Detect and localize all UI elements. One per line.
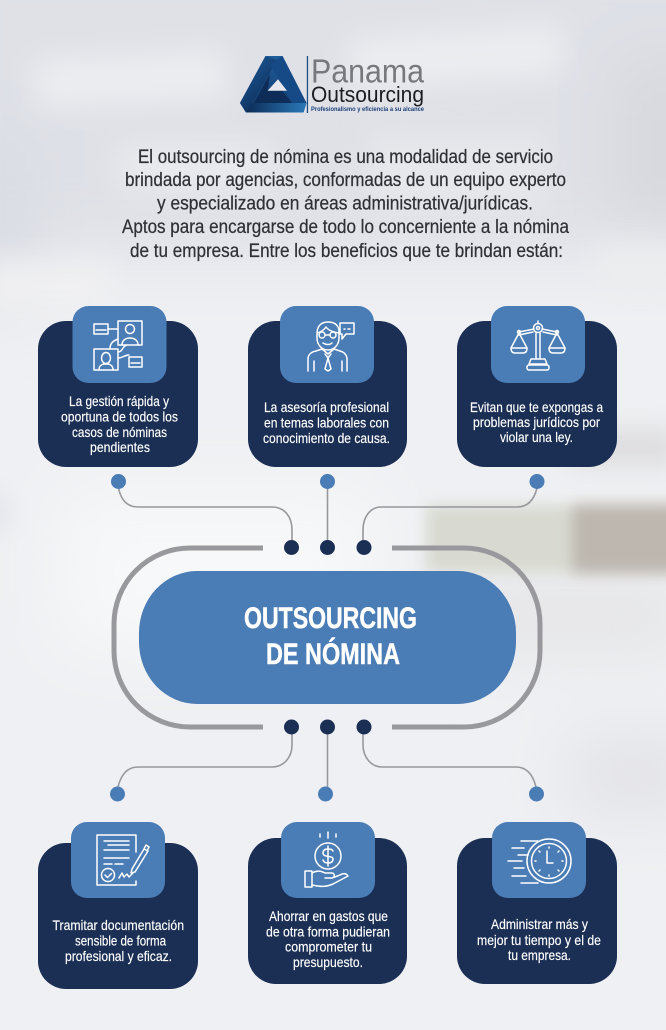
icon: hand holding coin	[305, 832, 348, 887]
intro text: brindada por agencias, conformadas de un equipo experto	[125, 170, 566, 191]
logo triangle mark	[240, 56, 306, 112]
logo: Panama Outsourcing: Profesionalismo y eficiencia a su alcance	[311, 106, 424, 113]
intro text: El outsourcing de nómina es una modalidad de servicio	[138, 147, 553, 168]
card: gestión rápida: La gestión rápida y	[69, 393, 169, 409]
intro text	[122, 147, 569, 262]
connector lines	[118, 481, 537, 794]
card: ahorrar en gastos: de otra forma pudieran	[266, 924, 390, 940]
card: gestión rápida: pendientes	[90, 439, 150, 455]
card: gestión rápida: oportuna de todos los	[61, 408, 178, 424]
icon: people network	[94, 321, 142, 370]
card: gestión rápida	[38, 306, 198, 467]
icon: signed document	[97, 835, 149, 885]
intro text: de tu empresa. Entre los beneficios que te brindan están:	[130, 241, 563, 262]
card: tramitar documentación: sensible de forma	[75, 932, 166, 948]
card: tramitar documentación	[38, 822, 198, 989]
card: administrar tiempo: Administrar más y	[491, 916, 588, 932]
card: asesoría profesional: en temas laborales con	[264, 414, 389, 430]
card: problemas jurídicos: Evitan que te expongas a	[470, 399, 603, 415]
card: asesoría profesional: La asesoría profesional	[264, 399, 389, 415]
card: problemas jurídicos	[457, 306, 617, 467]
connector dots	[110, 474, 544, 802]
grey ring around central pill	[114, 548, 540, 727]
icon: scales of justice	[511, 321, 565, 370]
card: asesoría profesional	[248, 306, 407, 467]
logo: Panama Outsourcing: Outsourcing	[311, 82, 424, 107]
card: tramitar documentación: Tramitar documentación	[52, 917, 184, 933]
card: asesoría profesional: conocimiento de causa.	[263, 430, 390, 446]
central pill: outsourcing de nómina	[139, 571, 516, 704]
card: problemas jurídicos: violar una ley.	[500, 429, 573, 445]
card: problemas jurídicos: problemas jurídicos por	[473, 414, 600, 430]
card: tramitar documentación: profesional y eficaz.	[65, 948, 172, 964]
card: ahorrar en gastos: comprometer tu	[285, 938, 372, 954]
central pill: outsourcing de nómina: DE NÓMINA	[266, 637, 400, 671]
icon: fast clock	[508, 839, 571, 883]
card: ahorrar en gastos: Ahorrar en gastos que	[269, 908, 388, 924]
card: administrar tiempo	[457, 822, 617, 984]
logo: Panama Outsourcing	[240, 52, 425, 113]
logo: Panama Outsourcing: Panama	[311, 52, 425, 90]
card: administrar tiempo: mejor tu tiempo y el de	[477, 932, 601, 948]
intro text: y especializado en áreas administrativa/jurídicas.	[157, 194, 533, 214]
central pill: outsourcing de nómina: OUTSOURCING	[244, 602, 417, 635]
intro text: Aptos para encargarse de todo lo concerniente a la nómina	[122, 217, 569, 238]
card: ahorrar en gastos	[248, 822, 407, 984]
card: gestión rápida: casos de nóminas	[72, 424, 167, 440]
icon: advisor with speech bubble	[308, 322, 354, 371]
card: ahorrar en gastos: presupuesto.	[293, 954, 363, 970]
card: administrar tiempo: tu empresa.	[508, 947, 571, 963]
